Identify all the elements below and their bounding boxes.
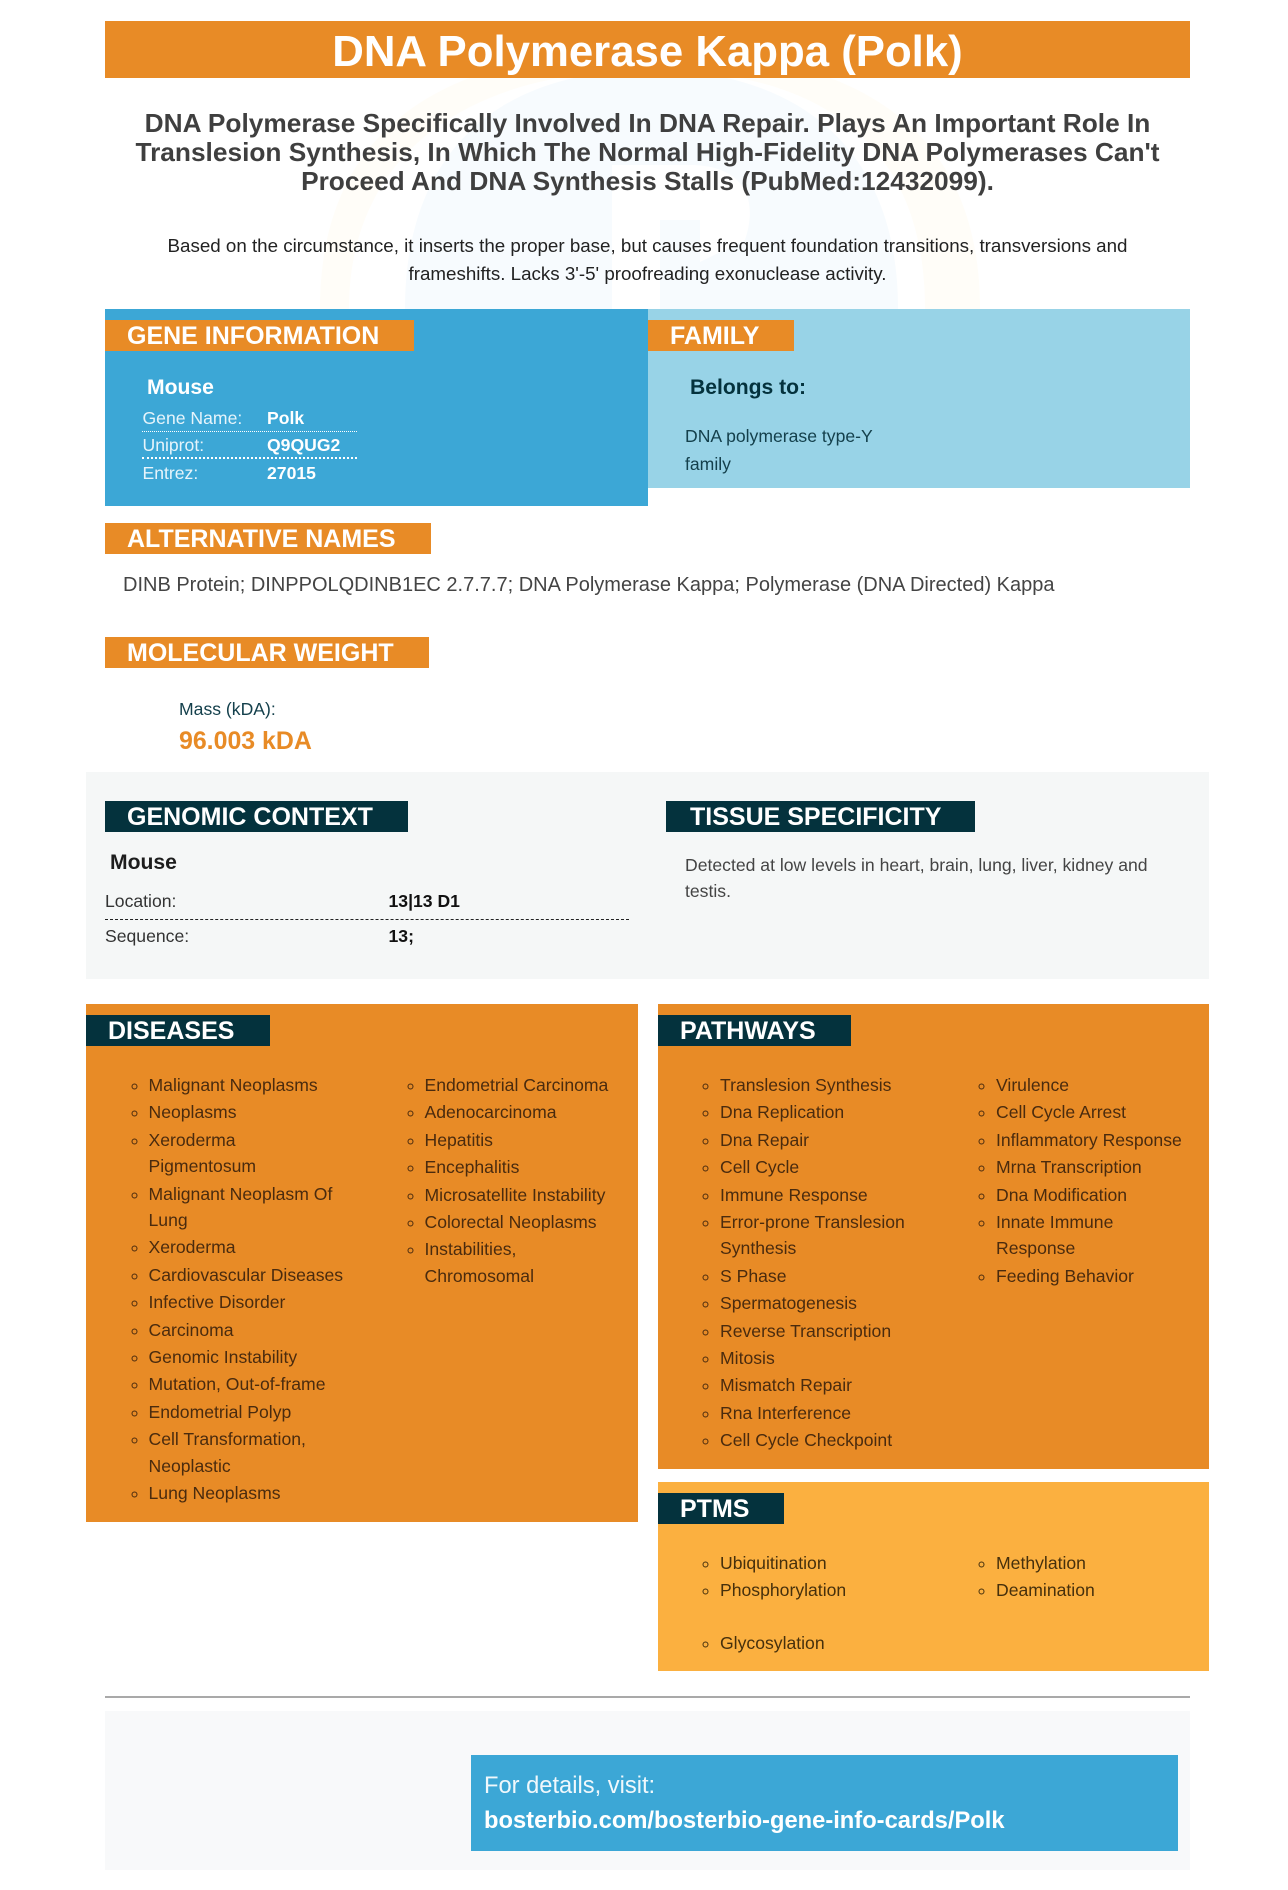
species name: Mouse <box>147 376 214 399</box>
pathways list column 1: Mismatch Repair <box>720 1375 852 1395</box>
sequence row: 13; <box>388 926 414 946</box>
mass label: Mass (kDA): <box>179 699 276 719</box>
subtitle heading: DNA Polymerase Specifically Involved In DNA Repair. Plays An Important Role In <box>145 108 1150 138</box>
pathways list column 1: Mitosis <box>720 1348 775 1368</box>
sequence row <box>105 926 414 946</box>
subtitle heading: Proceed And DNA Synthesis Stalls (PubMed:12432099). <box>301 166 994 196</box>
diseases list column 1: Carcinoma <box>148 1320 234 1340</box>
heading: family <box>648 320 794 351</box>
footer panel <box>105 1711 1190 1870</box>
pathways list column 1 <box>702 1075 905 1450</box>
pathways list column 1: Synthesis <box>720 1238 796 1258</box>
pathways list column 2: Inflammatory Response <box>996 1130 1182 1150</box>
heading: pathways: PATHWAYS <box>680 1017 816 1045</box>
panel: diseases <box>86 1004 638 1522</box>
tissue specificity text: Detected at low levels in heart, brain, lung, liver, kidney and <box>685 855 1148 875</box>
diseases list column 1: Lung Neoplasms <box>148 1483 281 1503</box>
subtitle heading: Translesion Synthesis, In Which The Normal High-Fidelity DNA Polymerases Can't <box>135 137 1160 167</box>
diseases list column 2: Chromosomal <box>424 1266 534 1286</box>
panel: pathways <box>658 1004 1209 1469</box>
heading: molecular weight: MOLECULAR WEIGHT <box>127 639 394 667</box>
location row: 13|13 D1 <box>388 891 460 911</box>
pathways list column 1: Dna Replication <box>720 1102 844 1122</box>
pathways list column 2: Virulence <box>996 1075 1069 1095</box>
gene data table: Entrez: <box>142 463 198 483</box>
PTMs list column 1: Glycosylation <box>720 1633 825 1653</box>
heading: tissue specificity: TISSUE SPECIFICITY <box>690 803 941 831</box>
heading: genomic context: GENOMIC CONTEXT <box>127 803 373 831</box>
call to action box <box>471 1755 1178 1851</box>
family description <box>685 426 873 474</box>
details label: For details, visit: <box>484 1773 655 1799</box>
pathways list column 2: Dna Modification <box>996 1185 1127 1205</box>
heading: diseases: DISEASES <box>108 1017 234 1045</box>
panel: PTMs <box>658 1482 1209 1671</box>
diseases list column 2: Instabilities, <box>424 1239 516 1259</box>
background watermark logo <box>0 0 1288 520</box>
subtitle heading <box>135 108 1160 196</box>
heading: pathways <box>658 1015 851 1046</box>
title bar: DNA Polymerase Kappa (Polk) <box>332 27 963 76</box>
heading: diseases <box>86 1015 270 1046</box>
PTMs list column 2 <box>978 1553 1095 1600</box>
pathways list column 1: S Phase <box>720 1266 787 1286</box>
description paragraph <box>168 235 1127 284</box>
pathways list column 1: Cell Cycle <box>720 1157 799 1177</box>
pathways list column 2: Innate Immune <box>996 1212 1113 1232</box>
panel: gene information <box>105 309 648 506</box>
heading: PTMs <box>658 1493 784 1524</box>
panel: family <box>648 309 1190 488</box>
diseases list column 2: Hepatitis <box>424 1130 493 1150</box>
diseases list column 1: Lung <box>148 1210 188 1230</box>
pathways list column 2: Response <box>996 1238 1075 1258</box>
mass value: 96.003 kDA <box>179 727 312 755</box>
description paragraph: Based on the circumstance, it inserts the proper base, but causes frequent foundation transitions, transversions and <box>168 235 1127 256</box>
diseases list column 1: Malignant Neoplasms <box>148 1075 318 1095</box>
gene data table: 27015 <box>267 463 316 483</box>
pathways list column 1: Translesion Synthesis <box>720 1075 891 1095</box>
diseases list column 1: Xeroderma <box>148 1130 236 1150</box>
heading: family: FAMILY <box>670 322 759 350</box>
pathways list column 2 <box>978 1075 1182 1286</box>
diseases list column 1 <box>132 1075 343 1503</box>
diseases list column 1: Endometrial Polyp <box>148 1402 291 1422</box>
pathways list column 1: Dna Repair <box>720 1130 809 1150</box>
PTMs list column 1 <box>702 1553 846 1653</box>
species name: Mouse <box>110 851 177 874</box>
footer divider <box>105 1696 1190 1698</box>
diseases list column 1: Xeroderma <box>148 1237 236 1257</box>
heading: alternative names: ALTERNATIVE NAMES <box>127 525 396 553</box>
location row: Location: <box>105 891 176 911</box>
diseases list column 2: Encephalitis <box>424 1157 519 1177</box>
pathways list column 2: Mrna Transcription <box>996 1157 1142 1177</box>
pathways list column 1: Reverse Transcription <box>720 1321 891 1341</box>
pathways list column 1: Rna Interference <box>720 1403 851 1423</box>
pathways list column 1: Immune Response <box>720 1185 868 1205</box>
panel: genomic context and tissue specificity <box>86 772 1209 979</box>
gene data table <box>142 408 357 483</box>
diseases list column 1: Mutation, Out-of-frame <box>148 1374 325 1394</box>
pathways list column 1: Spermatogenesis <box>720 1293 857 1313</box>
location row <box>105 891 460 911</box>
pathways list column 1: Error-prone Translesion <box>720 1212 905 1232</box>
diseases list column 2: Microsatellite Instability <box>424 1185 605 1205</box>
heading: PTMs: PTMS <box>680 1495 749 1523</box>
details url: bosterbio.com/bosterbio-gene-info-cards/Polk <box>484 1808 1005 1834</box>
family description: family <box>685 454 731 474</box>
diseases list column 1: Infective Disorder <box>148 1292 285 1312</box>
PTMs list column 1: Phosphorylation <box>720 1580 846 1600</box>
family description: DNA polymerase type-Y <box>685 426 873 446</box>
diseases list column 1: Genomic Instability <box>148 1347 297 1367</box>
diseases list column 2: Colorectal Neoplasms <box>424 1212 597 1232</box>
alternative names text: DINB Protein; DINPPOLQDINB1EC 2.7.7.7; DNA Polymerase Kappa; Polymerase (DNA Directed) Kappa <box>123 574 1054 596</box>
title bar <box>105 21 1190 78</box>
diseases list column 1: Malignant Neoplasm Of <box>148 1184 332 1204</box>
gene data table: Q9QUG2 <box>267 435 340 455</box>
pathways list column 2: Cell Cycle Arrest <box>996 1102 1126 1122</box>
diseases list column 1: Neoplastic <box>148 1456 231 1476</box>
diseases list column 2 <box>408 1075 608 1286</box>
PTMs list column 2: Deamination <box>996 1580 1095 1600</box>
diseases list column 2: Endometrial Carcinoma <box>424 1075 608 1095</box>
sequence row: Sequence: <box>105 926 189 946</box>
gene data table: Gene Name: <box>142 408 242 428</box>
gene data table: Uniprot: <box>142 435 204 455</box>
description paragraph: frameshifts. Lacks 3'-5' proofreading exonuclease activity. <box>409 263 886 284</box>
heading: gene information: GENE INFORMATION <box>127 322 379 350</box>
gene data table: Polk <box>267 408 304 428</box>
pathways list column 2: Feeding Behavior <box>996 1266 1134 1286</box>
PTMs list column 2: Methylation <box>996 1553 1086 1573</box>
diseases list column 1: Cell Transformation, <box>148 1429 306 1449</box>
tissue specificity text <box>685 855 1148 901</box>
PTMs list column 1: Ubiquitination <box>720 1553 827 1573</box>
diseases list column 2: Adenocarcinoma <box>424 1102 557 1122</box>
tissue specificity text: testis. <box>685 881 731 901</box>
diseases list column 1: Pigmentosum <box>148 1156 256 1176</box>
belongs to label: Belongs to: <box>690 376 806 399</box>
pathways list column 1: Cell Cycle Checkpoint <box>720 1430 892 1450</box>
dotted divider <box>105 919 629 920</box>
diseases list column 1: Cardiovascular Diseases <box>148 1265 343 1285</box>
diseases list column 1: Neoplasms <box>148 1102 237 1122</box>
